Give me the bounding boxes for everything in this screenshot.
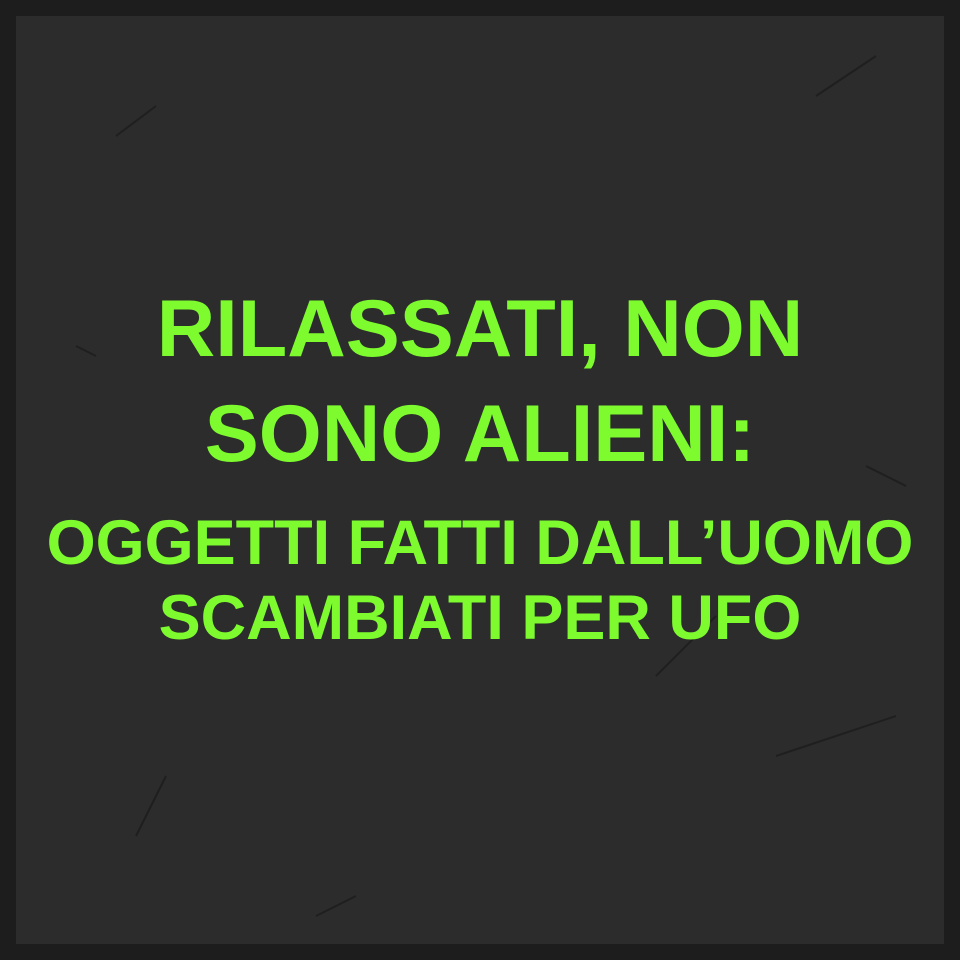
- title line 1: RILASSATI, NON: [157, 284, 803, 374]
- title line 2: SONO ALIENI:: [205, 389, 755, 479]
- subtitle line 1: OGGETTI FATTI DALL’UOMO: [47, 508, 913, 578]
- subtitle line 2: SCAMBIATI PER UFO: [159, 583, 801, 653]
